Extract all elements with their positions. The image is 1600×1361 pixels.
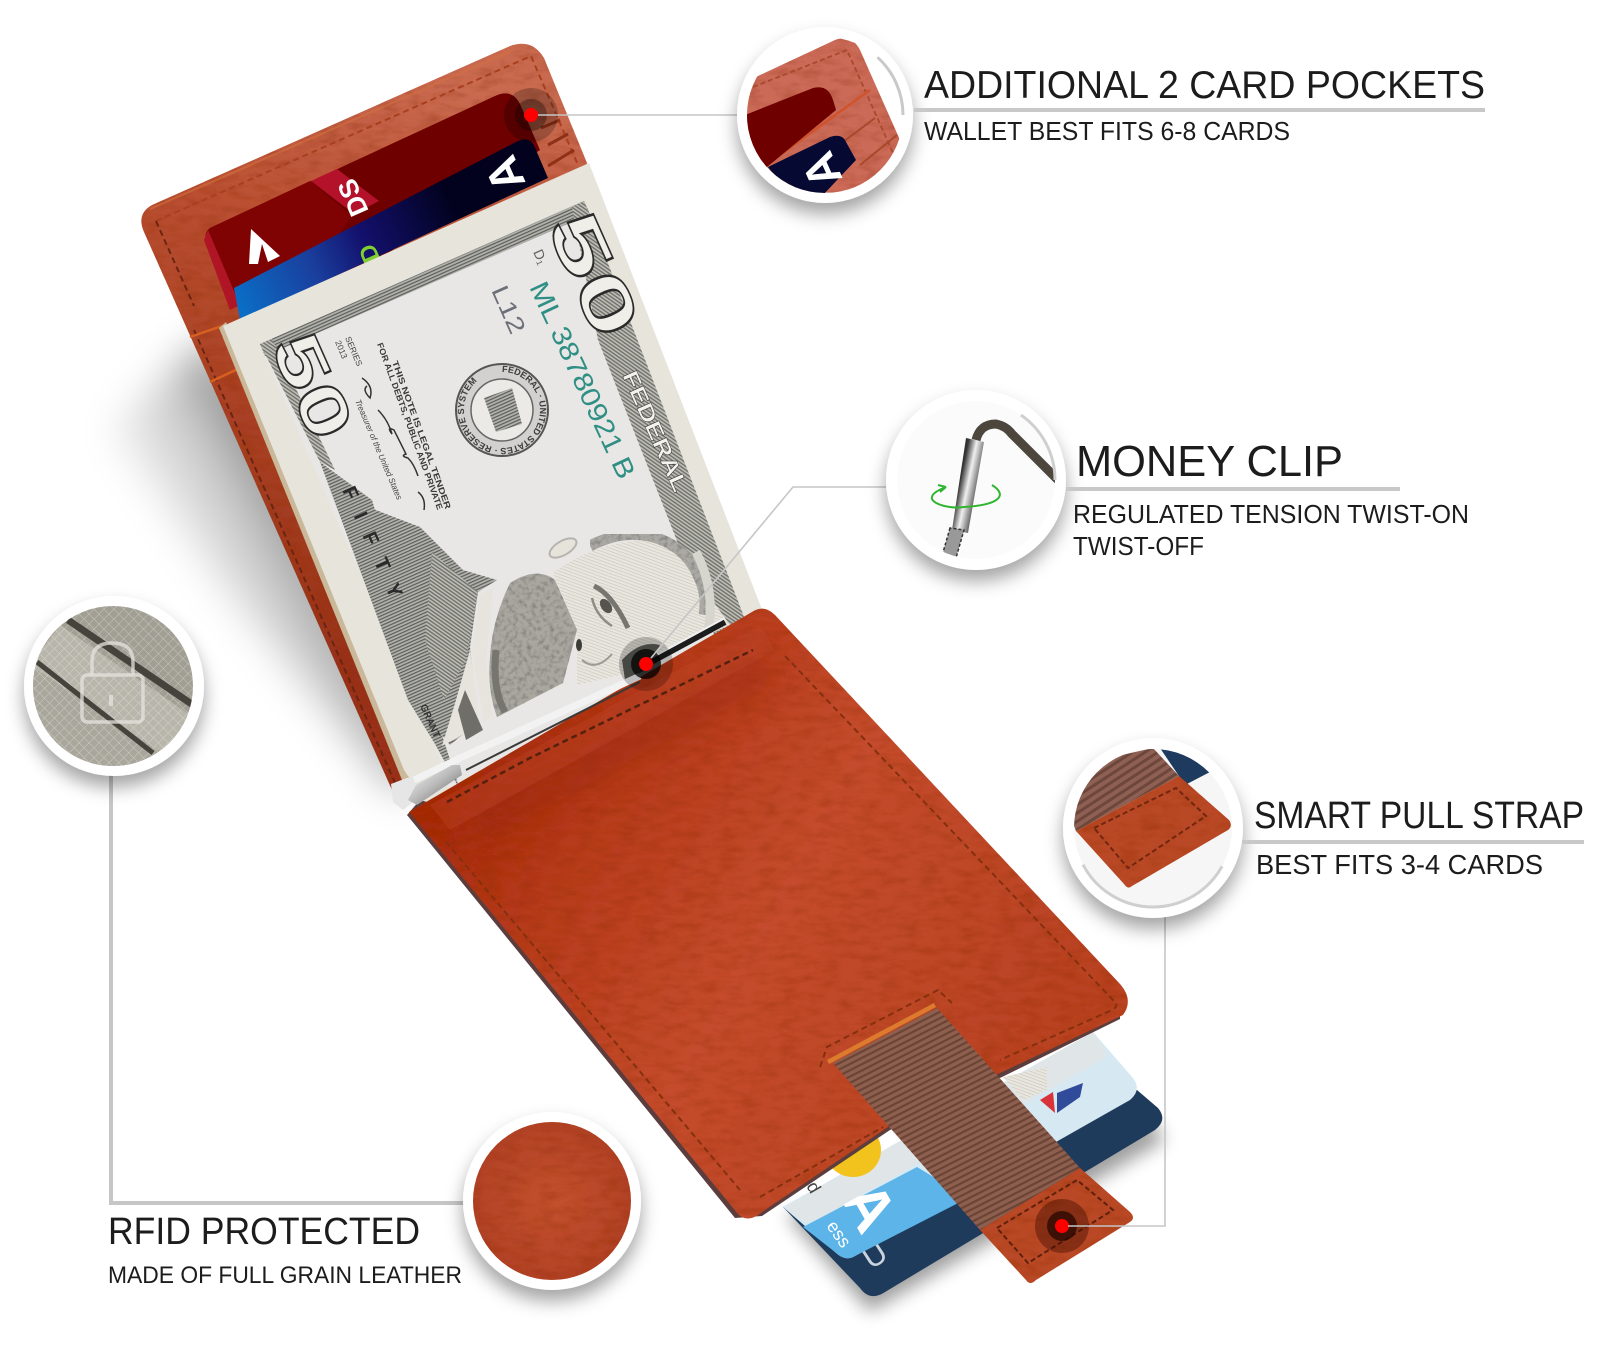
banknote engraving: FOR ALL DEBTS, PUBLIC AND PRIVATE xyxy=(375,341,445,511)
callout circle: additional pockets xyxy=(735,27,913,203)
lower cards: ess xyxy=(823,1217,855,1251)
banknote engraving: 2013 xyxy=(333,339,350,360)
heading: additional card pockets xyxy=(914,64,1485,146)
icon: padlock xyxy=(82,643,143,722)
leader lines xyxy=(111,115,1165,1226)
callout circle: RFID lock xyxy=(10,596,204,790)
eye xyxy=(600,598,612,614)
heading: RFID protected xyxy=(108,1211,462,1289)
icon: clip post xyxy=(952,438,984,533)
jacket xyxy=(374,510,497,745)
signature xyxy=(362,378,424,510)
blue card in pocket: A xyxy=(474,149,535,200)
banknote engraving xyxy=(260,201,744,784)
navy card xyxy=(783,1090,1162,1296)
silver money clip xyxy=(391,618,725,810)
beard xyxy=(489,574,577,717)
face xyxy=(553,540,730,685)
treasurer text: Treasurer of the United States xyxy=(353,398,405,502)
callout circle: additional pockets: A xyxy=(791,145,852,196)
heading: money clip: MONEY CLIP xyxy=(1076,437,1343,486)
lower cards xyxy=(783,1032,1162,1296)
lower cards: U xyxy=(856,1234,894,1276)
heading: money clip xyxy=(1066,437,1469,561)
heading: money clip: REGULATED TENSION TWIST-ON xyxy=(1073,499,1469,529)
callout circle: money clip xyxy=(886,390,1066,570)
wallet: lower leather panel xyxy=(407,609,1128,1219)
banknote stack xyxy=(219,163,762,802)
marker: pull strap xyxy=(1035,1199,1089,1253)
border letters: FIFTY xyxy=(337,483,413,616)
seal: FEDERAL · UNITED STATES · RESERVE SYSTEM xyxy=(458,366,546,454)
wallet: upper flap xyxy=(141,44,740,800)
heading: smart pull strap xyxy=(1242,795,1584,880)
pull strap xyxy=(828,1005,1133,1283)
heading: RFID protected: RFID PROTECTED xyxy=(108,1211,420,1253)
blue card in pocket xyxy=(234,139,548,320)
federal text: FEDERAL xyxy=(617,367,693,496)
blue card in pocket: D xyxy=(354,240,385,267)
heading: additional card pockets: ADDITIONAL 2 CARD POCKETS xyxy=(924,64,1485,107)
panel stitching xyxy=(446,650,1116,1197)
heading: RFID protected: MADE OF FULL GRAIN LEATHER xyxy=(108,1262,462,1289)
banknote engraving: D₁ xyxy=(530,247,551,267)
hair xyxy=(590,534,705,615)
heading: additional card pockets: WALLET BEST FITS 6-8 CARDS xyxy=(924,116,1290,146)
bottom fifty numeral: 50 xyxy=(257,322,369,450)
series text: SERIES xyxy=(343,335,365,368)
icon: rotation arrow xyxy=(932,485,1000,508)
ear xyxy=(548,537,578,559)
marker: money clip xyxy=(619,637,673,691)
marker: card pockets xyxy=(504,88,558,142)
tender text: THIS NOTE IS LEGAL TENDER xyxy=(390,359,453,510)
serial number: ML 38780921 B xyxy=(524,277,641,483)
heading: smart pull strap: BEST FITS 3-4 CARDS xyxy=(1256,849,1543,880)
heading: money clip: TWIST-OFF xyxy=(1073,531,1204,561)
grant label: GRANT xyxy=(417,703,442,740)
red card in pocket xyxy=(204,93,540,340)
portrait xyxy=(363,505,730,746)
callout circle: leather xyxy=(463,1112,641,1290)
plate code: L12 xyxy=(486,281,531,338)
light card xyxy=(783,1032,1137,1258)
wallet shadow xyxy=(110,340,1165,1312)
callout circle: strap xyxy=(1060,738,1243,918)
top fifty numeral: 50 xyxy=(532,200,656,349)
red card in pocket: DS xyxy=(332,174,374,221)
lower cards: A xyxy=(828,1170,910,1244)
nose xyxy=(576,639,582,651)
lower cards: d xyxy=(803,1178,825,1197)
